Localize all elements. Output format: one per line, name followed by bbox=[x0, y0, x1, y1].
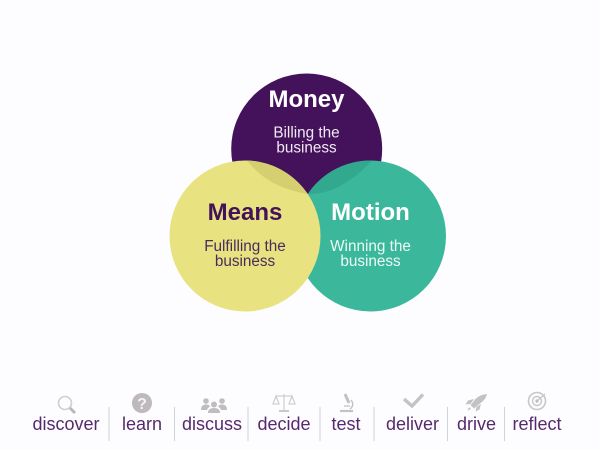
step: decide bbox=[257, 394, 311, 434]
overlap shade: Money and Motion bbox=[308, 160, 372, 194]
step: reflect bbox=[512, 392, 562, 434]
circle: Money bbox=[231, 74, 382, 224]
text: Means: Fulfilling the bbox=[204, 238, 286, 255]
icon: target bbox=[528, 392, 546, 410]
text: Motion: Motion bbox=[331, 199, 410, 226]
circle: Means bbox=[170, 160, 320, 312]
text: Money: business bbox=[276, 140, 337, 156]
icon: microscope bbox=[340, 394, 353, 411]
step: drive bbox=[457, 394, 496, 434]
overlap shade: Money and Means bbox=[247, 160, 308, 194]
icon: question mark: ? bbox=[137, 396, 147, 413]
text: Money bbox=[268, 86, 345, 156]
step: test: test bbox=[331, 414, 361, 434]
icon: scales bbox=[273, 394, 295, 411]
step: learn: learn bbox=[122, 414, 162, 434]
step: learn bbox=[122, 393, 162, 434]
circle: Motion bbox=[295, 160, 446, 312]
text: Motion: Winning the bbox=[330, 238, 411, 255]
icon: rocket bbox=[466, 394, 487, 412]
text: Money: Billing the bbox=[273, 124, 340, 142]
icon: check mark bbox=[404, 394, 423, 406]
step: discuss: discuss bbox=[182, 414, 242, 434]
step: discover bbox=[32, 396, 100, 434]
step: test bbox=[331, 394, 361, 434]
icon: people group bbox=[201, 398, 227, 413]
text: Motion bbox=[330, 199, 411, 270]
icon: magnifier bbox=[58, 396, 75, 413]
text: Means bbox=[204, 199, 286, 270]
text: Money: Money bbox=[268, 86, 345, 113]
venn diagram bbox=[170, 74, 446, 312]
step: deliver bbox=[386, 394, 439, 434]
process steps row bbox=[32, 392, 562, 434]
step: decide: decide bbox=[257, 414, 311, 434]
step: discuss bbox=[182, 398, 242, 434]
text: Motion: business bbox=[340, 253, 401, 270]
step: drive: drive bbox=[457, 414, 496, 434]
step: reflect: reflect bbox=[512, 414, 562, 434]
step: deliver: deliver bbox=[386, 414, 439, 434]
text: Means: business bbox=[215, 253, 276, 270]
text: Means: Means bbox=[208, 199, 282, 226]
step: discover: discover bbox=[32, 414, 100, 434]
